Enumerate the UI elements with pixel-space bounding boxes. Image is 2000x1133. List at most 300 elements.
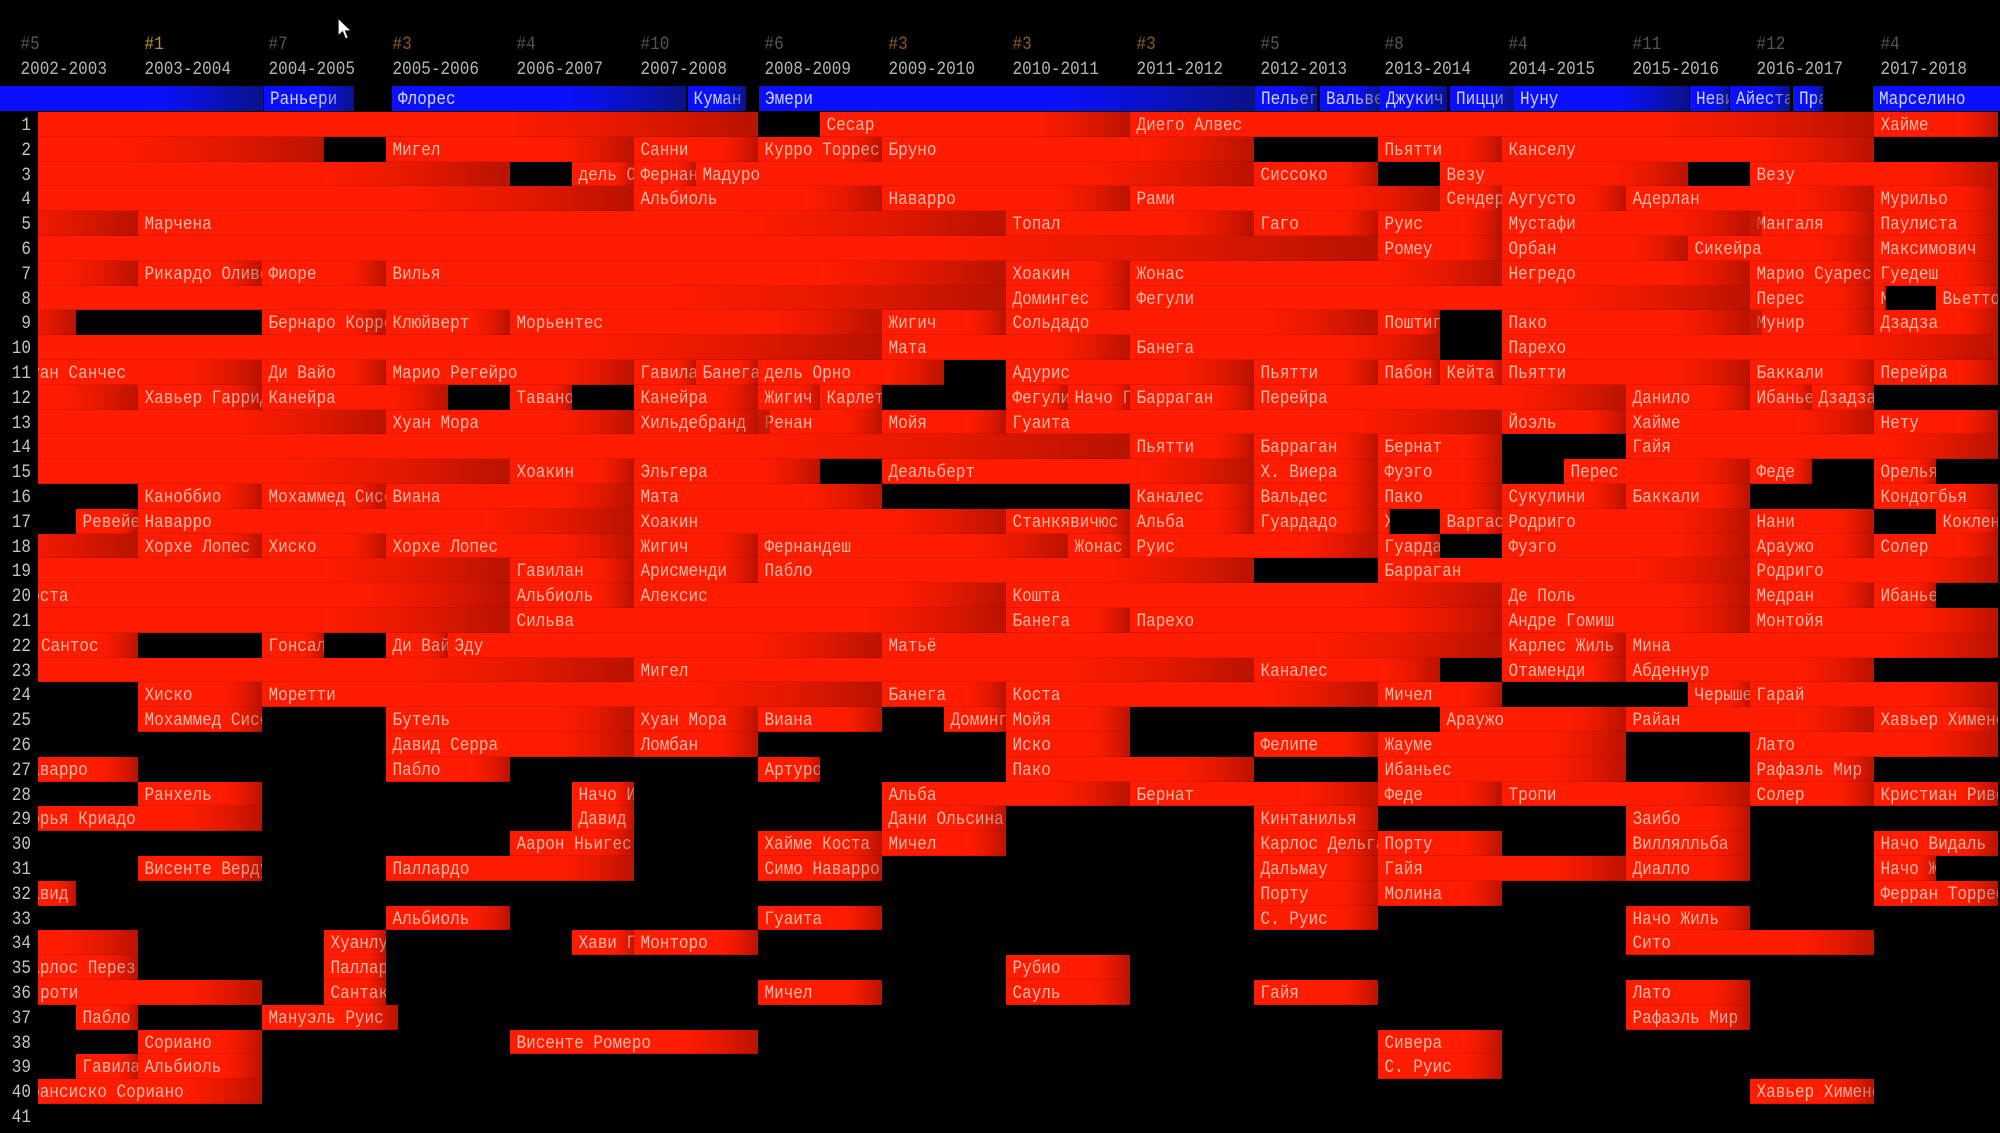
row 36: Мичел <box>764 983 813 1004</box>
text: #1 <box>144 34 164 55</box>
text: 10 <box>12 338 31 359</box>
row 25: Бутель <box>392 710 450 731</box>
text: 15 <box>12 462 31 483</box>
row 33: Начо Жиль <box>1632 909 1719 929</box>
row 25 <box>138 707 1998 732</box>
coach timeline bar: Куман <box>694 89 742 110</box>
row 29 <box>38 806 1750 831</box>
text: 17 <box>12 512 31 533</box>
row 17: Родриго <box>1508 512 1576 533</box>
row 5 <box>38 211 1998 236</box>
text: 2009-2010 <box>888 59 975 80</box>
row 7: Жонас <box>1136 264 1185 285</box>
row 21: Монтойя <box>1756 611 1824 632</box>
row 15: Феде <box>1756 462 1795 483</box>
row 9: Пако <box>1508 313 1547 334</box>
text: 27 <box>12 760 31 781</box>
text: #5 <box>1260 34 1280 55</box>
row 7: Фиоре <box>268 264 317 285</box>
text: 2012-2013 <box>1260 59 1347 80</box>
row 9: Морьентес <box>516 313 603 334</box>
row 27 <box>38 757 1874 782</box>
coach timeline bar: Нуну <box>1520 89 1558 110</box>
row 15: Фуэго <box>1384 462 1433 483</box>
row 5: Руис <box>1384 214 1423 235</box>
row 10: Банега <box>1136 338 1194 359</box>
row 34 <box>38 930 1874 955</box>
row 26: Фелипе <box>1260 735 1318 756</box>
row 2 <box>38 137 1874 162</box>
row 16: Виана <box>392 487 441 508</box>
row 34: Сито <box>1632 933 1671 954</box>
row 24: Коста <box>1012 685 1061 706</box>
text: 16 <box>12 487 31 508</box>
text: 2004-2005 <box>268 59 355 80</box>
row 26: Лато <box>1756 735 1795 756</box>
row 3: Мадуро <box>702 165 760 185</box>
row 6: Орбан <box>1508 239 1557 260</box>
row 24: Гарай <box>1756 685 1805 706</box>
row 28: Бернат <box>1136 785 1194 805</box>
row 7 <box>38 261 1998 286</box>
row 29: Давид <box>578 809 627 830</box>
row 17: Станкявичюс <box>1012 512 1118 533</box>
row 9: Сольдадо <box>1012 313 1089 334</box>
row 18: Солер <box>1880 537 1929 557</box>
row 28: Солер <box>1756 785 1805 805</box>
row 1 <box>38 112 1998 137</box>
row 32: Молина <box>1384 884 1442 905</box>
text: 39 <box>12 1057 31 1078</box>
row 12 <box>38 385 1874 410</box>
coach timeline bar <box>0 86 2000 111</box>
season header labels <box>20 59 1967 80</box>
row 39 <box>38 1054 1998 1079</box>
row 12: Барраган <box>1136 388 1213 409</box>
row 18: Жигич <box>640 537 689 557</box>
row 31: Паллардо <box>392 859 469 880</box>
row 4: Наварро <box>888 189 956 210</box>
row 5: Паулиста <box>1880 214 1957 235</box>
row 13: Ренан <box>764 413 813 433</box>
row 2: Канселу <box>1508 140 1576 161</box>
row 5: Гаго <box>1260 214 1299 235</box>
row 16: Баккали <box>1632 487 1700 508</box>
text: 21 <box>12 611 31 632</box>
row 8: Домингес <box>1012 289 1089 309</box>
text: 40 <box>12 1082 31 1103</box>
coach timeline bar: Эмери <box>765 89 813 110</box>
text: 14 <box>12 437 31 458</box>
coach timeline bar: Джукич <box>1386 89 1444 110</box>
row 18: Фернандеш <box>764 537 851 557</box>
text: #3 <box>888 34 908 55</box>
row 31 <box>138 856 1936 881</box>
row 18: Хиско <box>268 537 317 557</box>
row 20 <box>38 583 1936 608</box>
row 22: Сантос <box>41 636 99 657</box>
row 5: Топал <box>1012 214 1061 235</box>
text: 6 <box>21 239 31 260</box>
row 16 <box>138 484 1998 509</box>
row 20: Алексис <box>640 586 708 607</box>
text: 2007-2008 <box>640 59 727 80</box>
row 11: Пьятти <box>1508 363 1566 384</box>
text: 38 <box>12 1033 31 1053</box>
row 20: Медран <box>1756 586 1814 607</box>
row 23 <box>38 658 1874 682</box>
row 28: Феде <box>1384 785 1423 805</box>
row 8: Фегули <box>1136 289 1194 309</box>
text: 23 <box>12 661 31 681</box>
row 14: Пьятти <box>1136 437 1194 458</box>
row 28: Ранхель <box>144 785 212 805</box>
row 27: Пабло <box>392 760 441 781</box>
text: #7 <box>268 34 288 55</box>
text: 35 <box>12 958 31 979</box>
row 16: Каналес <box>1136 487 1204 508</box>
row 23: Отаменди <box>1508 661 1585 681</box>
row 13: Хайме <box>1632 413 1681 433</box>
text: 8 <box>21 289 31 309</box>
row 21 <box>38 608 1998 633</box>
row 17: Альба <box>1136 512 1185 533</box>
row 13: Йоэль <box>1508 413 1557 433</box>
row 33: Гуаита <box>764 909 822 929</box>
row 7: Марио Суарес <box>1756 264 1872 285</box>
row 26: Жауме <box>1384 735 1433 756</box>
row 36 <box>38 980 1998 1005</box>
row 16: Мата <box>640 487 679 508</box>
row 24: Банега <box>888 685 946 706</box>
row 12: Данило <box>1632 388 1690 409</box>
row 9: Жигич <box>888 313 937 334</box>
row 30: Мичел <box>888 834 937 855</box>
text: 2011-2012 <box>1136 59 1223 80</box>
row 37 <box>38 1005 1998 1030</box>
row 20: Кошта <box>1012 586 1061 607</box>
text: 13 <box>12 413 31 433</box>
text: 2003-2004 <box>144 59 231 80</box>
row 32 <box>38 881 1998 906</box>
row 19: Барраган <box>1384 561 1461 582</box>
row 37: Рафаэль Мир <box>1632 1008 1738 1029</box>
row 18: Фуэго <box>1508 537 1557 557</box>
coach timeline bar: Марселино <box>1879 89 1965 110</box>
row 12: Канейра <box>640 388 708 409</box>
row 18: Хорхе Лопес <box>392 537 498 557</box>
row 21: Парехо <box>1136 611 1194 632</box>
row 32: Порту <box>1260 884 1309 905</box>
row 36: Сауль <box>1012 983 1061 1004</box>
row 29: Дани Ольсина <box>888 809 1004 830</box>
row 24 <box>138 682 1998 707</box>
text: #12 <box>1756 34 1785 55</box>
row 27: Пако <box>1012 760 1051 781</box>
row 16: Кондогбья <box>1880 487 1967 508</box>
row 15: Х. Виера <box>1260 462 1337 483</box>
row 13: Хильдебранд <box>640 413 746 433</box>
row 23: Каналес <box>1260 661 1328 681</box>
text: 12 <box>12 388 31 409</box>
row 12: Перейра <box>1260 388 1328 409</box>
row 7: Хоакин <box>1012 264 1070 285</box>
row 30: Виллялльба <box>1632 834 1729 855</box>
text: 24 <box>12 685 31 706</box>
row 1: Хайме <box>1880 115 1929 136</box>
text: 2014-2015 <box>1508 59 1595 80</box>
row 24: Мичел <box>1384 685 1433 706</box>
row 11: Пьятти <box>1260 363 1318 384</box>
row 2: Санни <box>640 140 689 161</box>
text: 1 <box>21 115 31 136</box>
row 18: Руис <box>1136 537 1175 557</box>
row 4: Адерлан <box>1632 189 1700 210</box>
text: 2006-2007 <box>516 59 603 80</box>
row 13: Гуаита <box>1012 413 1070 433</box>
row 2: Пьятти <box>1384 140 1442 161</box>
row 20: Альбиоль <box>516 586 593 607</box>
row 15: Эльгера <box>640 462 708 483</box>
text: 29 <box>12 809 31 830</box>
text: #4 <box>1508 34 1528 55</box>
row 4: Аугусто <box>1508 189 1576 210</box>
row 8 <box>38 286 1998 310</box>
row 33: Альбиоль <box>392 909 469 929</box>
row 34: Монторо <box>640 933 708 954</box>
row 39: С. Руис <box>1384 1057 1452 1078</box>
text: #8 <box>1384 34 1404 55</box>
row 36: роти <box>40 983 78 1004</box>
row 13: Хуан Мора <box>392 413 479 433</box>
row 26: Давид Серра <box>392 735 498 756</box>
row 37: Пабло <box>82 1008 131 1029</box>
row 13 <box>38 410 1998 434</box>
row 17: Гуардадо <box>1260 512 1337 533</box>
row 24: Хиско <box>144 685 193 706</box>
row 10 <box>38 335 1998 360</box>
text: 2002-2003 <box>20 59 107 80</box>
text: #11 <box>1632 34 1661 55</box>
row 30: Начо Видаль <box>1880 834 1986 855</box>
text: 3 <box>21 165 31 185</box>
row 9: Клюйверт <box>392 313 469 334</box>
row 30 <box>510 831 1998 856</box>
row 24: Моретти <box>268 685 336 706</box>
row 21: Сильва <box>516 611 574 632</box>
row 25: Райан <box>1632 710 1681 731</box>
row 28 <box>138 782 1998 806</box>
row 3 <box>38 162 1998 186</box>
row 16: Сукулини <box>1508 487 1585 508</box>
row 6: Ромеу <box>1384 239 1433 260</box>
text: 33 <box>12 909 31 929</box>
row 6: Максимович <box>1880 239 1977 260</box>
row 19 <box>38 558 1998 583</box>
row 9: Дзадза <box>1880 313 1938 334</box>
text: 26 <box>12 735 31 756</box>
row 27: Рафаэль Мир <box>1756 760 1862 781</box>
row 31: Симо Наварро <box>764 859 880 880</box>
squad number axis <box>12 115 31 1128</box>
row 11: Ди Вайо <box>268 363 336 384</box>
row 1: Сесар <box>826 115 875 136</box>
row 38: Сориано <box>144 1033 212 1053</box>
row 7: Вилья <box>392 264 441 285</box>
text: 20 <box>12 586 31 607</box>
row 22: Мина <box>1632 636 1671 657</box>
text: 30 <box>12 834 31 855</box>
row 18 <box>38 534 1998 558</box>
row 22: Эду <box>454 636 483 657</box>
text: #3 <box>1012 34 1032 55</box>
row 17: Нани <box>1756 512 1795 533</box>
coach timeline bar: Пицци <box>1456 89 1504 110</box>
row 38: Сивера <box>1384 1033 1442 1053</box>
row 14: Бернат <box>1384 437 1442 458</box>
text: #3 <box>1136 34 1156 55</box>
text: 2017-2018 <box>1880 59 1967 80</box>
text: 2016-2017 <box>1756 59 1843 80</box>
row 10: Мата <box>888 338 927 359</box>
row 22 <box>38 633 1998 658</box>
text: 41 <box>12 1107 31 1128</box>
text: 19 <box>12 561 31 582</box>
row 26: Ломбан <box>640 735 698 756</box>
row 29: Заибо <box>1632 809 1681 830</box>
row 28: Альба <box>888 785 937 805</box>
row 5: Марчена <box>144 214 212 235</box>
row 26: Иско <box>1012 735 1051 756</box>
row 19: Родриго <box>1756 561 1824 582</box>
text: #3 <box>392 34 412 55</box>
row 19: Арисменди <box>640 561 727 582</box>
row 10: Парехо <box>1508 338 1566 359</box>
row 3: Везу <box>1446 165 1485 185</box>
row 14: Барраган <box>1260 437 1337 458</box>
text: 4 <box>21 189 31 210</box>
row 4 <box>38 186 1998 211</box>
row 4: Альбиоль <box>640 189 717 210</box>
row 35: Рубио <box>1012 958 1061 979</box>
row 31: Диалло <box>1632 859 1690 880</box>
row 11: дель Орно <box>764 363 851 384</box>
row 31: Гайя <box>1384 859 1423 880</box>
row 20: Де Поль <box>1508 586 1576 607</box>
row 18: Жонас <box>1074 537 1123 557</box>
row 7: Негредо <box>1508 264 1576 285</box>
row 16: Пако <box>1384 487 1423 508</box>
season header ranks <box>20 34 1900 55</box>
row 12: Канейра <box>268 388 336 409</box>
text: 2010-2011 <box>1012 59 1099 80</box>
row 25: Хуан Мора <box>640 710 727 731</box>
row 8: Перес <box>1756 289 1805 309</box>
row 13: Мойя <box>888 413 927 433</box>
icon: mouse cursor <box>338 19 350 38</box>
text: 32 <box>12 884 31 905</box>
row 11 <box>38 360 1998 385</box>
row 19: Гавилан <box>516 561 584 582</box>
row 3: Везу <box>1756 165 1795 185</box>
row 18: Хорхе Лопес <box>144 537 250 557</box>
row 36: Лато <box>1632 983 1671 1004</box>
row 17 <box>76 509 1998 534</box>
text: 2015-2016 <box>1632 59 1719 80</box>
row 2: Курро Торрес <box>764 140 880 161</box>
text: #6 <box>764 34 784 55</box>
text: 11 <box>12 363 31 384</box>
row 22: Карлес Жиль <box>1508 636 1614 657</box>
text: 36 <box>12 983 31 1004</box>
row 38 <box>38 1030 1998 1054</box>
row 28: Тропи <box>1508 785 1557 805</box>
text: 7 <box>21 264 31 285</box>
coach timeline bar: Раньери <box>270 89 337 110</box>
row 1: Диего Алвес <box>1136 115 1242 136</box>
row 11: Марио Регейро <box>392 363 517 384</box>
text: 2 <box>21 140 31 161</box>
row 4: Мурильо <box>1880 189 1948 210</box>
row 14 <box>38 434 1998 459</box>
row 7: Гуедеш <box>1880 264 1938 285</box>
row 11: Пабон <box>1384 363 1433 384</box>
row 33 <box>386 906 1750 930</box>
row 15: Деальберт <box>888 462 975 483</box>
text: 37 <box>12 1008 31 1029</box>
text: #4 <box>516 34 536 55</box>
row 23: Абденнур <box>1632 661 1709 681</box>
text: #4 <box>1880 34 1900 55</box>
row 2: Бруно <box>888 140 937 161</box>
row 21: Банега <box>1012 611 1070 632</box>
row 5: Мустафи <box>1508 214 1576 235</box>
coach timeline bar: Флорес <box>398 89 456 110</box>
row 11: Перейра <box>1880 363 1948 384</box>
row 19: Пабло <box>764 561 813 582</box>
text: 34 <box>12 933 31 954</box>
row 9: Мунир <box>1756 313 1805 334</box>
row 16: Вальдес <box>1260 487 1328 508</box>
text: 31 <box>12 859 31 880</box>
row 25: Араужо <box>1446 710 1504 731</box>
row 15 <box>38 459 1936 484</box>
row 30: Порту <box>1384 834 1433 855</box>
row 6 <box>38 236 1998 261</box>
row 13: Нету <box>1880 413 1919 433</box>
text: 2013-2014 <box>1384 59 1471 80</box>
row 38: Висенте Ромеро <box>516 1033 651 1053</box>
text: 22 <box>12 636 31 657</box>
row 27: Ибаньес <box>1384 760 1452 781</box>
row 11: Баккали <box>1756 363 1824 384</box>
text: 25 <box>12 710 31 731</box>
row 18: Араужо <box>1756 537 1814 557</box>
text: #5 <box>20 34 40 55</box>
row 2: Мигел <box>392 140 441 161</box>
row 25: Мойя <box>1012 710 1051 731</box>
row 17: Наварро <box>144 512 212 533</box>
row 16: Каноббио <box>144 487 221 508</box>
row 33: С. Руис <box>1260 909 1328 929</box>
row 15: Перес <box>1570 462 1619 483</box>
row 11: Кейта <box>1446 363 1495 384</box>
row 23: Мигел <box>640 661 689 681</box>
row 11: Адурис <box>1012 363 1070 384</box>
row 25: Виана <box>764 710 813 731</box>
text: #10 <box>640 34 669 55</box>
row 40 <box>38 1079 1998 1104</box>
